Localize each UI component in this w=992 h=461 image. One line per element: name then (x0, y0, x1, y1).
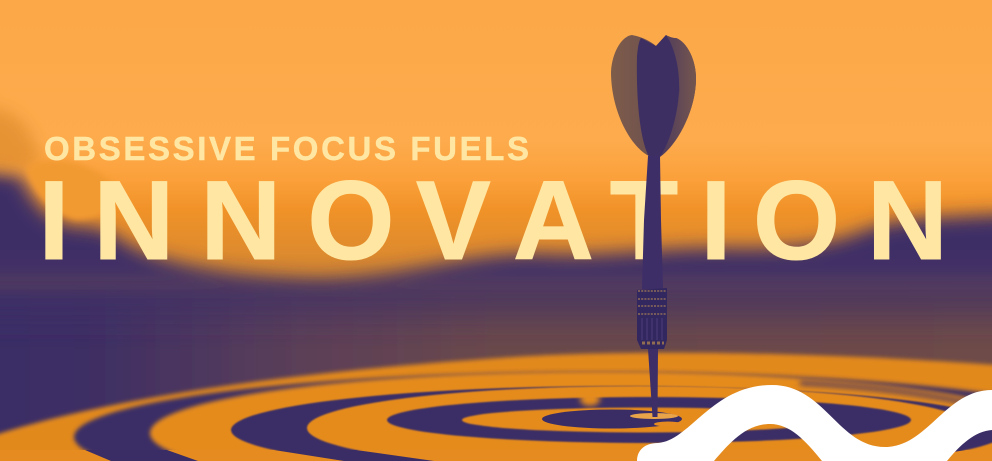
dart barrel (637, 288, 667, 349)
subtitle: OBSESSIVE FOCUS FUELS (44, 130, 529, 167)
white wave (637, 385, 992, 461)
dart shaft (642, 156, 663, 289)
dart flight (611, 35, 696, 157)
dart needle (648, 349, 658, 417)
dartboard rings (0, 353, 992, 461)
icon: dart (611, 35, 696, 417)
title: innovation: INNOVATION (38, 158, 948, 283)
